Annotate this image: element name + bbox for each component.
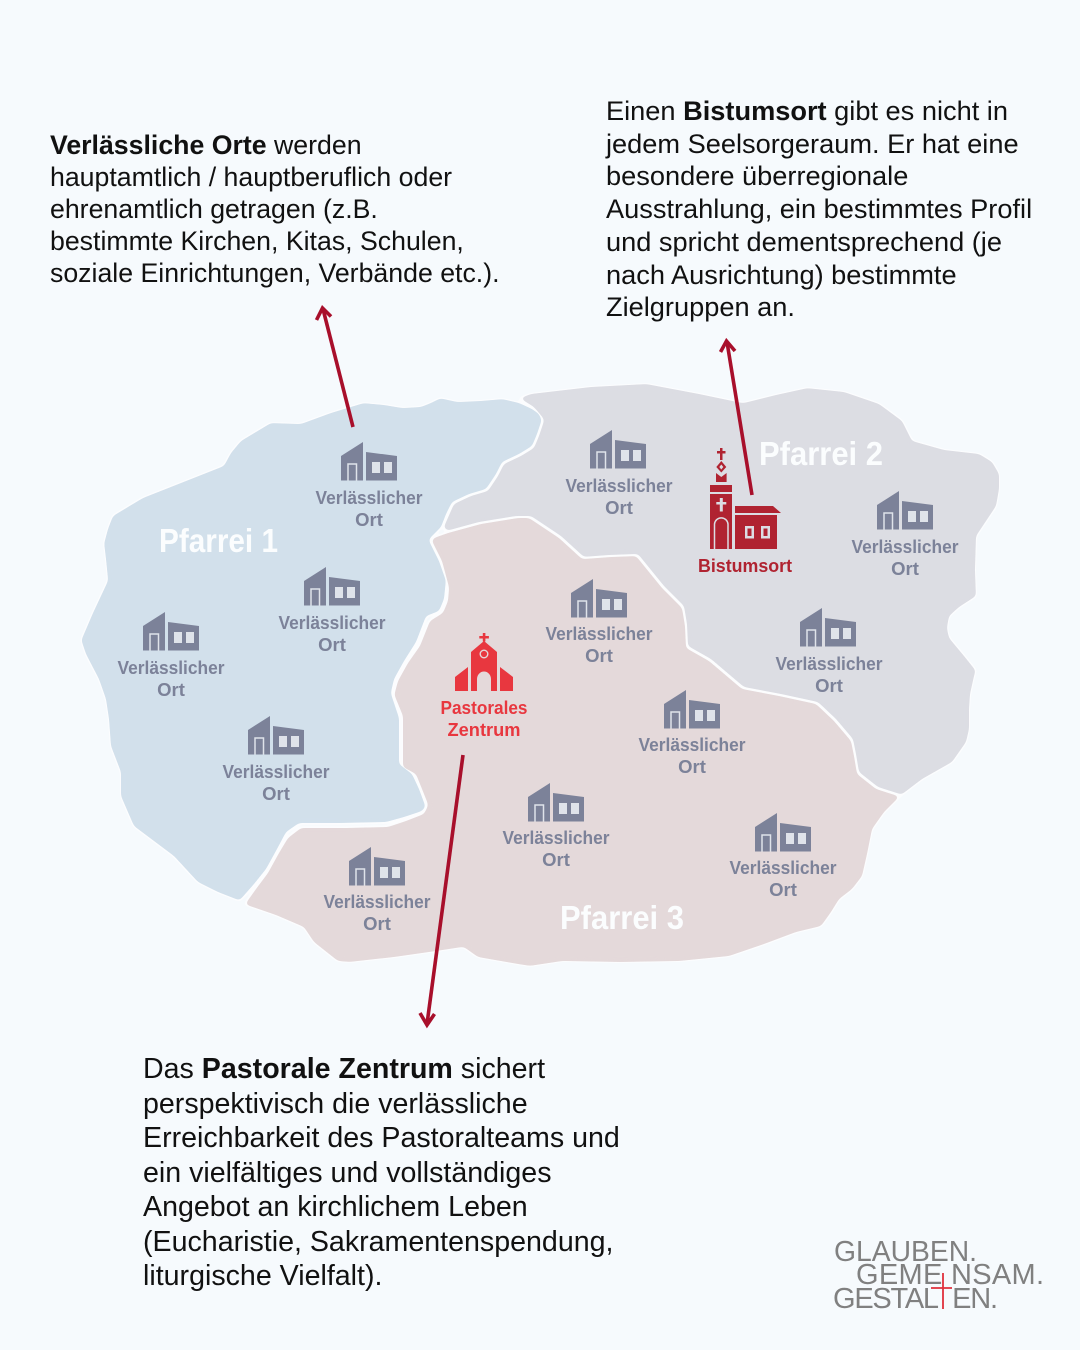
logo: Glauben. Gemeinsam. Gestalten. bbox=[833, 1236, 1044, 1315]
icon: Verlässlicher Ort, Pfarrei 3 top: Verlässlicher bbox=[546, 623, 652, 644]
text: Pastorales Zentrum: ein vielfältiges und vollständiges bbox=[143, 1156, 552, 1188]
icon: Pastorales Zentrum church: Zentrum bbox=[448, 719, 520, 740]
text: Bistumsort: Ausstrahlung, ein bestimmtes Profil bbox=[606, 193, 1032, 224]
logo: Glauben. Gemeinsam. Gestalten.: GESTALTEN. bbox=[833, 1283, 998, 1315]
text: Pastorales Zentrum: Angebot an kirchlichem Leben bbox=[143, 1191, 528, 1223]
icon: Verlässlicher Ort, Pfarrei 2 bottom: Verlässlicher bbox=[776, 653, 882, 674]
icon: Verlässlicher Ort, Pfarrei 1 middle bbox=[278, 567, 386, 655]
text: Bistumsort: nach Ausrichtung) bestimmte bbox=[606, 259, 957, 290]
icon: Verlässlicher Ort, Pfarrei 1 left: Ort bbox=[157, 679, 185, 700]
icon: Verlässlicher Ort, Pfarrei 2 bottom bbox=[776, 608, 882, 696]
icon: Verlässlicher Ort, Pfarrei 3 centre bbox=[502, 783, 610, 870]
icon: Verlässlicher Ort, Pfarrei 3 left: Verlässlicher bbox=[324, 891, 430, 912]
icon: Verlässlicher Ort, Pfarrei 1 bottom bbox=[222, 716, 330, 804]
icon: Verlässlicher Ort, Pfarrei 2 left bbox=[566, 430, 672, 518]
icon: Verlässlicher Ort, Pfarrei 1 left: Verlässlicher bbox=[118, 657, 224, 678]
icon: Verlässlicher Ort, Pfarrei 1 bottom: Verlässlicher bbox=[222, 761, 330, 782]
text: Pastorales Zentrum bbox=[143, 1053, 620, 1292]
text: Verlässliche Orte: Verlässliche Orte werden bbox=[50, 130, 362, 160]
logo: Glauben. Gemeinsam. Gestalten.: GEMEINSAM. bbox=[856, 1259, 1044, 1291]
icon: Bistumsort church: Bistumsort bbox=[698, 555, 792, 576]
label: Pfarrei 1: Pfarrei 1 bbox=[159, 522, 278, 559]
icon: Verlässlicher Ort, Pfarrei 2 right: Ort bbox=[891, 558, 919, 579]
icon: Verlässlicher Ort, Pfarrei 1 left bbox=[118, 612, 224, 700]
icon: Verlässlicher Ort, Pfarrei 3 right: Ort bbox=[769, 879, 797, 900]
icon: Verlässlicher Ort, Pfarrei 3 right: Verlässlicher bbox=[730, 857, 836, 878]
text: Bistumsort bbox=[605, 95, 1032, 322]
text: Pastorales Zentrum: perspektivisch die verlässliche bbox=[143, 1088, 528, 1120]
region: Pfarrei 3 bbox=[243, 517, 902, 967]
text: Verlässliche Orte: ehrenamtlich getragen (z.B. bbox=[50, 194, 378, 224]
text: Pastorales Zentrum: Das Pastorale Zentrum sichert bbox=[143, 1053, 545, 1085]
icon: Verlässlicher Ort, Pfarrei 1 middle: Ort bbox=[318, 634, 346, 655]
text: Bistumsort: jedem Seelsorgeraum. Er hat eine bbox=[606, 128, 1019, 159]
icon: Verlässlicher Ort, Pfarrei 1 top: Ort bbox=[355, 509, 383, 530]
arrow: to Bistumsort text bbox=[720, 341, 752, 495]
text: Verlässliche Orte: bestimmte Kirchen, Kitas, Schulen, bbox=[50, 226, 464, 256]
icon: Verlässlicher Ort, Pfarrei 2 left: Verlässlicher bbox=[566, 475, 672, 496]
icon: Verlässlicher Ort, Pfarrei 3 right bbox=[730, 813, 836, 900]
icon: Pastorales Zentrum church: Pastorales bbox=[440, 697, 528, 718]
label: Pfarrei 3: Pfarrei 3 bbox=[560, 899, 684, 936]
logo: Glauben. Gemeinsam. Gestalten.: GLAUBEN. bbox=[834, 1236, 977, 1268]
text: Bistumsort: Zielgruppen an. bbox=[606, 291, 795, 322]
arrow: to Verlässliche Orte text bbox=[316, 308, 353, 427]
text: Pastorales Zentrum: liturgische Vielfalt). bbox=[143, 1260, 382, 1292]
text: Pastorales Zentrum: (Eucharistie, Sakramentenspendung, bbox=[143, 1226, 614, 1258]
icon: Verlässlicher Ort, Pfarrei 3 centre: Verlässlicher bbox=[502, 827, 610, 848]
icon: Verlässlicher Ort, Pfarrei 1 middle: Verlässlicher bbox=[278, 612, 386, 633]
region: Pfarrei 2 bbox=[442, 383, 1000, 796]
icon: Verlässlicher Ort, Pfarrei 1 bottom: Ort bbox=[262, 783, 290, 804]
text: Verlässliche Orte: hauptamtlich / hauptberuflich oder bbox=[50, 162, 452, 192]
icon: Verlässlicher Ort, Pfarrei 3 top: Ort bbox=[585, 645, 613, 666]
region: Pfarrei 1 bbox=[80, 397, 543, 902]
icon: Verlässlicher Ort, Pfarrei 3 upper right: Verlässlicher bbox=[638, 734, 746, 755]
icon: Verlässlicher Ort, Pfarrei 3 upper right: Ort bbox=[678, 756, 706, 777]
icon: Verlässlicher Ort, Pfarrei 3 left bbox=[324, 847, 430, 934]
text: Bistumsort: und spricht dementsprechend (je bbox=[606, 226, 1002, 257]
icon: Verlässlicher Ort, Pfarrei 2 right: Verlässlicher bbox=[852, 536, 958, 557]
icon: Verlässlicher Ort, Pfarrei 1 top: Verlässlicher bbox=[316, 487, 422, 508]
text: Verlässliche Orte bbox=[50, 130, 500, 288]
text: Bistumsort: besondere überregionale bbox=[606, 160, 908, 191]
text: Bistumsort: Einen Bistumsort gibt es nicht in bbox=[606, 95, 1008, 126]
text: Verlässliche Orte: soziale Einrichtungen, Verbände etc.). bbox=[50, 258, 500, 288]
icon: Verlässlicher Ort, Pfarrei 2 bottom: Ort bbox=[815, 675, 843, 696]
label: Pfarrei 2: Pfarrei 2 bbox=[759, 435, 883, 472]
icon: Verlässlicher Ort, Pfarrei 3 centre: Ort bbox=[542, 849, 570, 870]
icon: Pastorales Zentrum church bbox=[440, 633, 528, 740]
icon: Verlässlicher Ort, Pfarrei 3 top bbox=[546, 579, 652, 666]
icon: Verlässlicher Ort, Pfarrei 3 left: Ort bbox=[363, 913, 391, 934]
icon: Verlässlicher Ort, Pfarrei 1 top bbox=[316, 442, 422, 530]
icon: Verlässlicher Ort, Pfarrei 2 right bbox=[852, 491, 958, 579]
arrow: to Pastorales Zentrum text bbox=[420, 755, 463, 1025]
icon: Bistumsort church bbox=[698, 448, 792, 576]
text: Pastorales Zentrum: Erreichbarkeit des Pastoralteams und bbox=[143, 1122, 620, 1154]
icon: Verlässlicher Ort, Pfarrei 3 upper right bbox=[638, 690, 746, 777]
icon: Verlässlicher Ort, Pfarrei 2 left: Ort bbox=[605, 497, 633, 518]
